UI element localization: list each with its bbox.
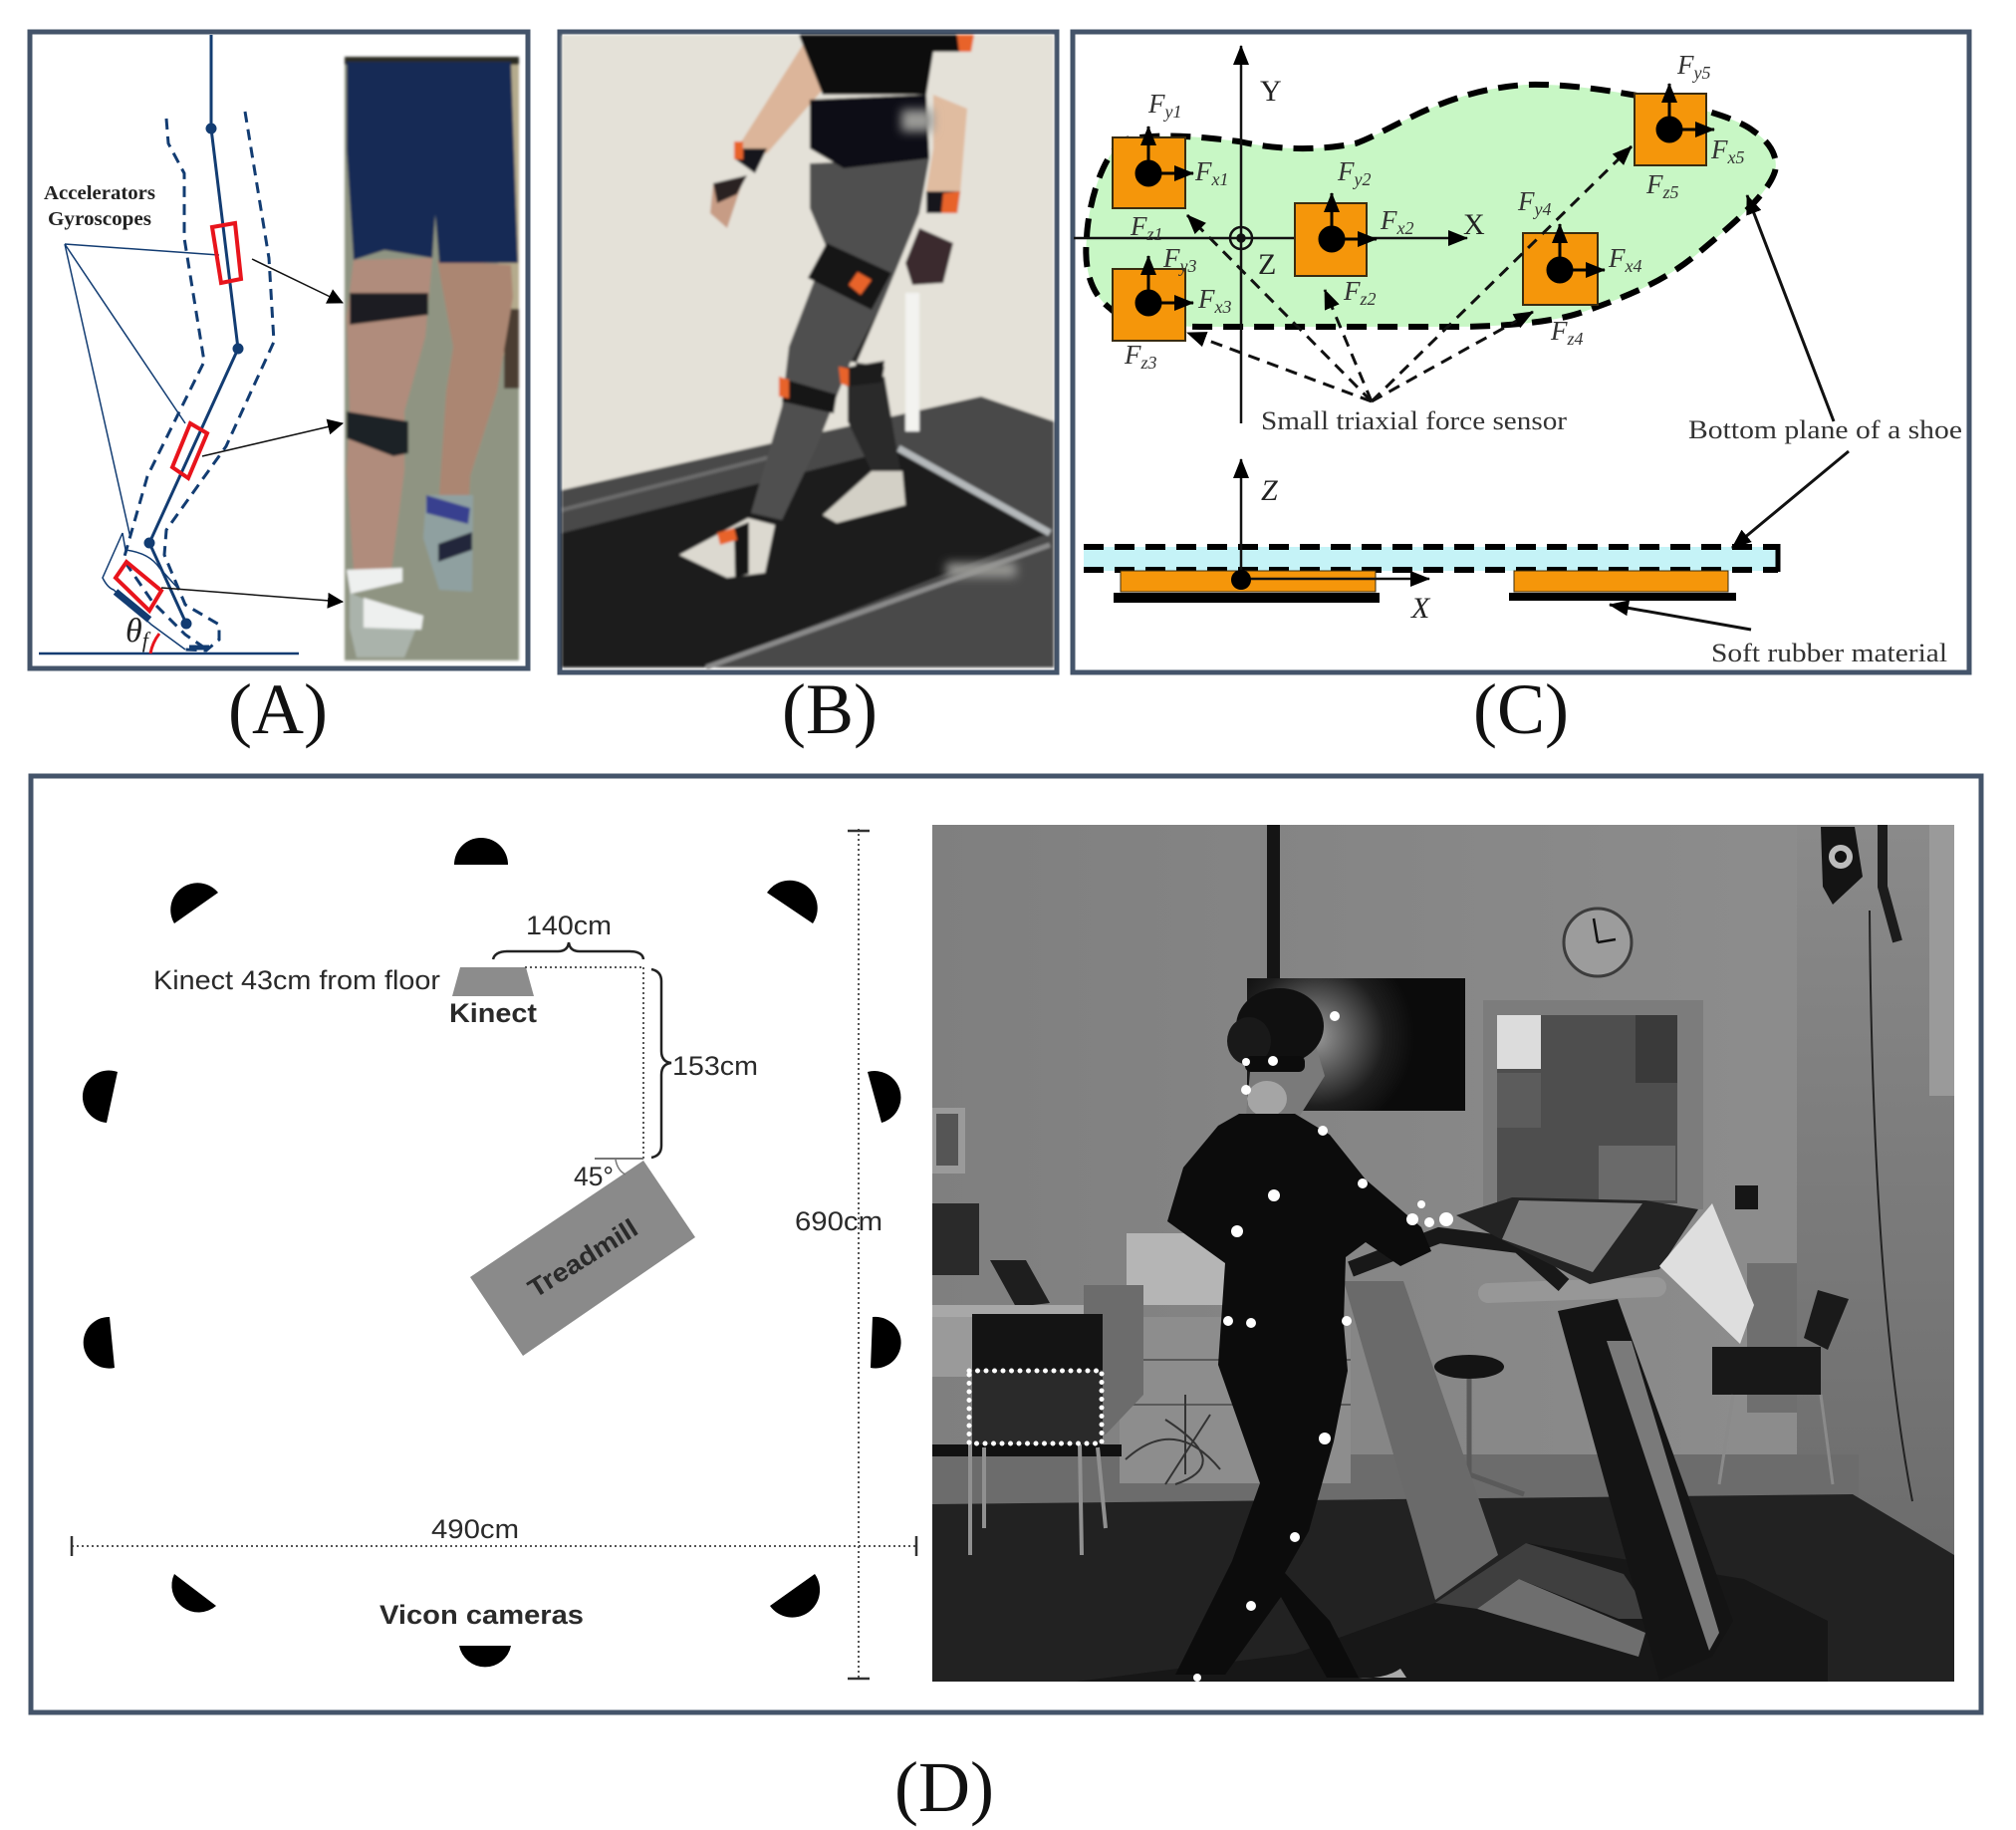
force labels: F (1125, 340, 1141, 370)
blurred patches (901, 110, 1016, 577)
force labels: F (1518, 186, 1534, 216)
caption A: (A) (228, 669, 328, 749)
force labels: x4 (1624, 256, 1641, 276)
arrows to photo (161, 259, 343, 602)
plan labels (153, 911, 882, 1630)
axis labels: Z (1261, 474, 1278, 507)
force labels: F (1163, 243, 1179, 273)
panel C: force sensor diagram (1073, 32, 1969, 672)
axis labels: Z (1258, 248, 1276, 281)
label: theta f: f (142, 628, 151, 653)
axis labels: X (1463, 208, 1485, 241)
force labels (1124, 50, 1745, 373)
plan labels: 153cm (672, 1051, 758, 1081)
panel D: capture lab (31, 776, 1981, 1712)
side view of sole (1084, 459, 1778, 603)
plan labels: 690cm (795, 1206, 882, 1236)
caption C: (C) (1473, 669, 1569, 749)
force labels: z2 (1359, 289, 1377, 309)
force labels: y3 (1177, 256, 1197, 276)
axis labels (1258, 75, 1485, 625)
label: theta f: θ (126, 613, 142, 650)
text labels: Bottom plane of a shoe (1688, 415, 1962, 444)
white motion markers (1193, 1011, 1453, 1682)
force labels: y4 (1532, 199, 1552, 219)
force labels: y5 (1691, 63, 1711, 83)
Vicon cameras (83, 838, 901, 1667)
force labels: y2 (1353, 169, 1371, 189)
text labels (1261, 406, 1962, 667)
axis labels: Y (1260, 75, 1282, 108)
photo: legs with sensors (345, 57, 519, 660)
plan labels: Kinect 43cm from floor (153, 965, 440, 995)
force labels: x1 (1211, 169, 1229, 189)
caption B: (B) (782, 669, 878, 749)
force labels: F (1646, 169, 1663, 199)
floor plan (72, 829, 916, 1679)
force labels: z1 (1145, 224, 1163, 244)
wall clock (1564, 909, 1632, 976)
walking person (1167, 988, 1431, 1678)
photo: person walking on mat (562, 35, 1054, 667)
axes (1074, 46, 1467, 423)
force labels: F (1338, 156, 1355, 186)
force labels: F (1344, 276, 1361, 306)
force labels: x5 (1727, 147, 1745, 167)
text labels: Soft rubber material (1711, 639, 1947, 667)
sensor boxes (1113, 94, 1706, 341)
ceiling camera (1821, 825, 1912, 1501)
force labels: F (1381, 205, 1396, 235)
photo: motion capture scene (932, 825, 1954, 1682)
force labels: F (1551, 316, 1568, 346)
treadmill (1076, 1197, 1828, 1682)
dotted Kinect box (969, 1371, 1102, 1443)
force labels: F (1677, 50, 1693, 80)
wall TV (1247, 978, 1465, 1111)
diagram: leg skeleton (39, 35, 299, 654)
dashed leader arrows (1187, 146, 1632, 401)
Kinect shape (452, 967, 534, 996)
force labels: F (1198, 284, 1215, 314)
plan labels: Vicon cameras (379, 1600, 584, 1630)
force labels: x3 (1213, 297, 1231, 317)
force labels: F (1148, 89, 1165, 119)
label: accelerators gyroscopes: Accelerators (44, 182, 155, 204)
panel B: person photo (560, 32, 1057, 672)
plan labels: Treadmill (522, 1212, 643, 1304)
sensor force arrows (1136, 84, 1714, 315)
doorway (1483, 1000, 1703, 1209)
caption D: (D) (894, 1747, 994, 1827)
shoe outline (1086, 85, 1776, 327)
force labels: z3 (1139, 353, 1157, 373)
force labels: x2 (1396, 218, 1414, 238)
force labels: z5 (1661, 182, 1679, 202)
text labels: Small triaxial force sensor (1261, 406, 1567, 435)
force labels: F (1609, 243, 1626, 273)
plan labels: 140cm (526, 911, 612, 940)
force labels: F (1131, 211, 1147, 241)
force labels: F (1711, 134, 1727, 164)
dimension lines (72, 829, 916, 1679)
plan labels: 45° (574, 1162, 614, 1191)
plan labels: Kinect (449, 998, 537, 1028)
callout arrows (1610, 195, 1849, 630)
label: accelerators gyroscopes: Gyroscopes (48, 208, 151, 230)
label: accelerators gyroscopes (44, 182, 155, 230)
force labels: F (1195, 156, 1211, 186)
treadmill shape (470, 1161, 695, 1356)
panel A: leg sensors (30, 32, 528, 668)
plan labels: 490cm (431, 1514, 519, 1544)
force labels: y1 (1163, 102, 1181, 122)
sensors: red rectangles (116, 223, 241, 654)
axis labels: X (1410, 592, 1431, 625)
force labels: z4 (1566, 329, 1584, 349)
